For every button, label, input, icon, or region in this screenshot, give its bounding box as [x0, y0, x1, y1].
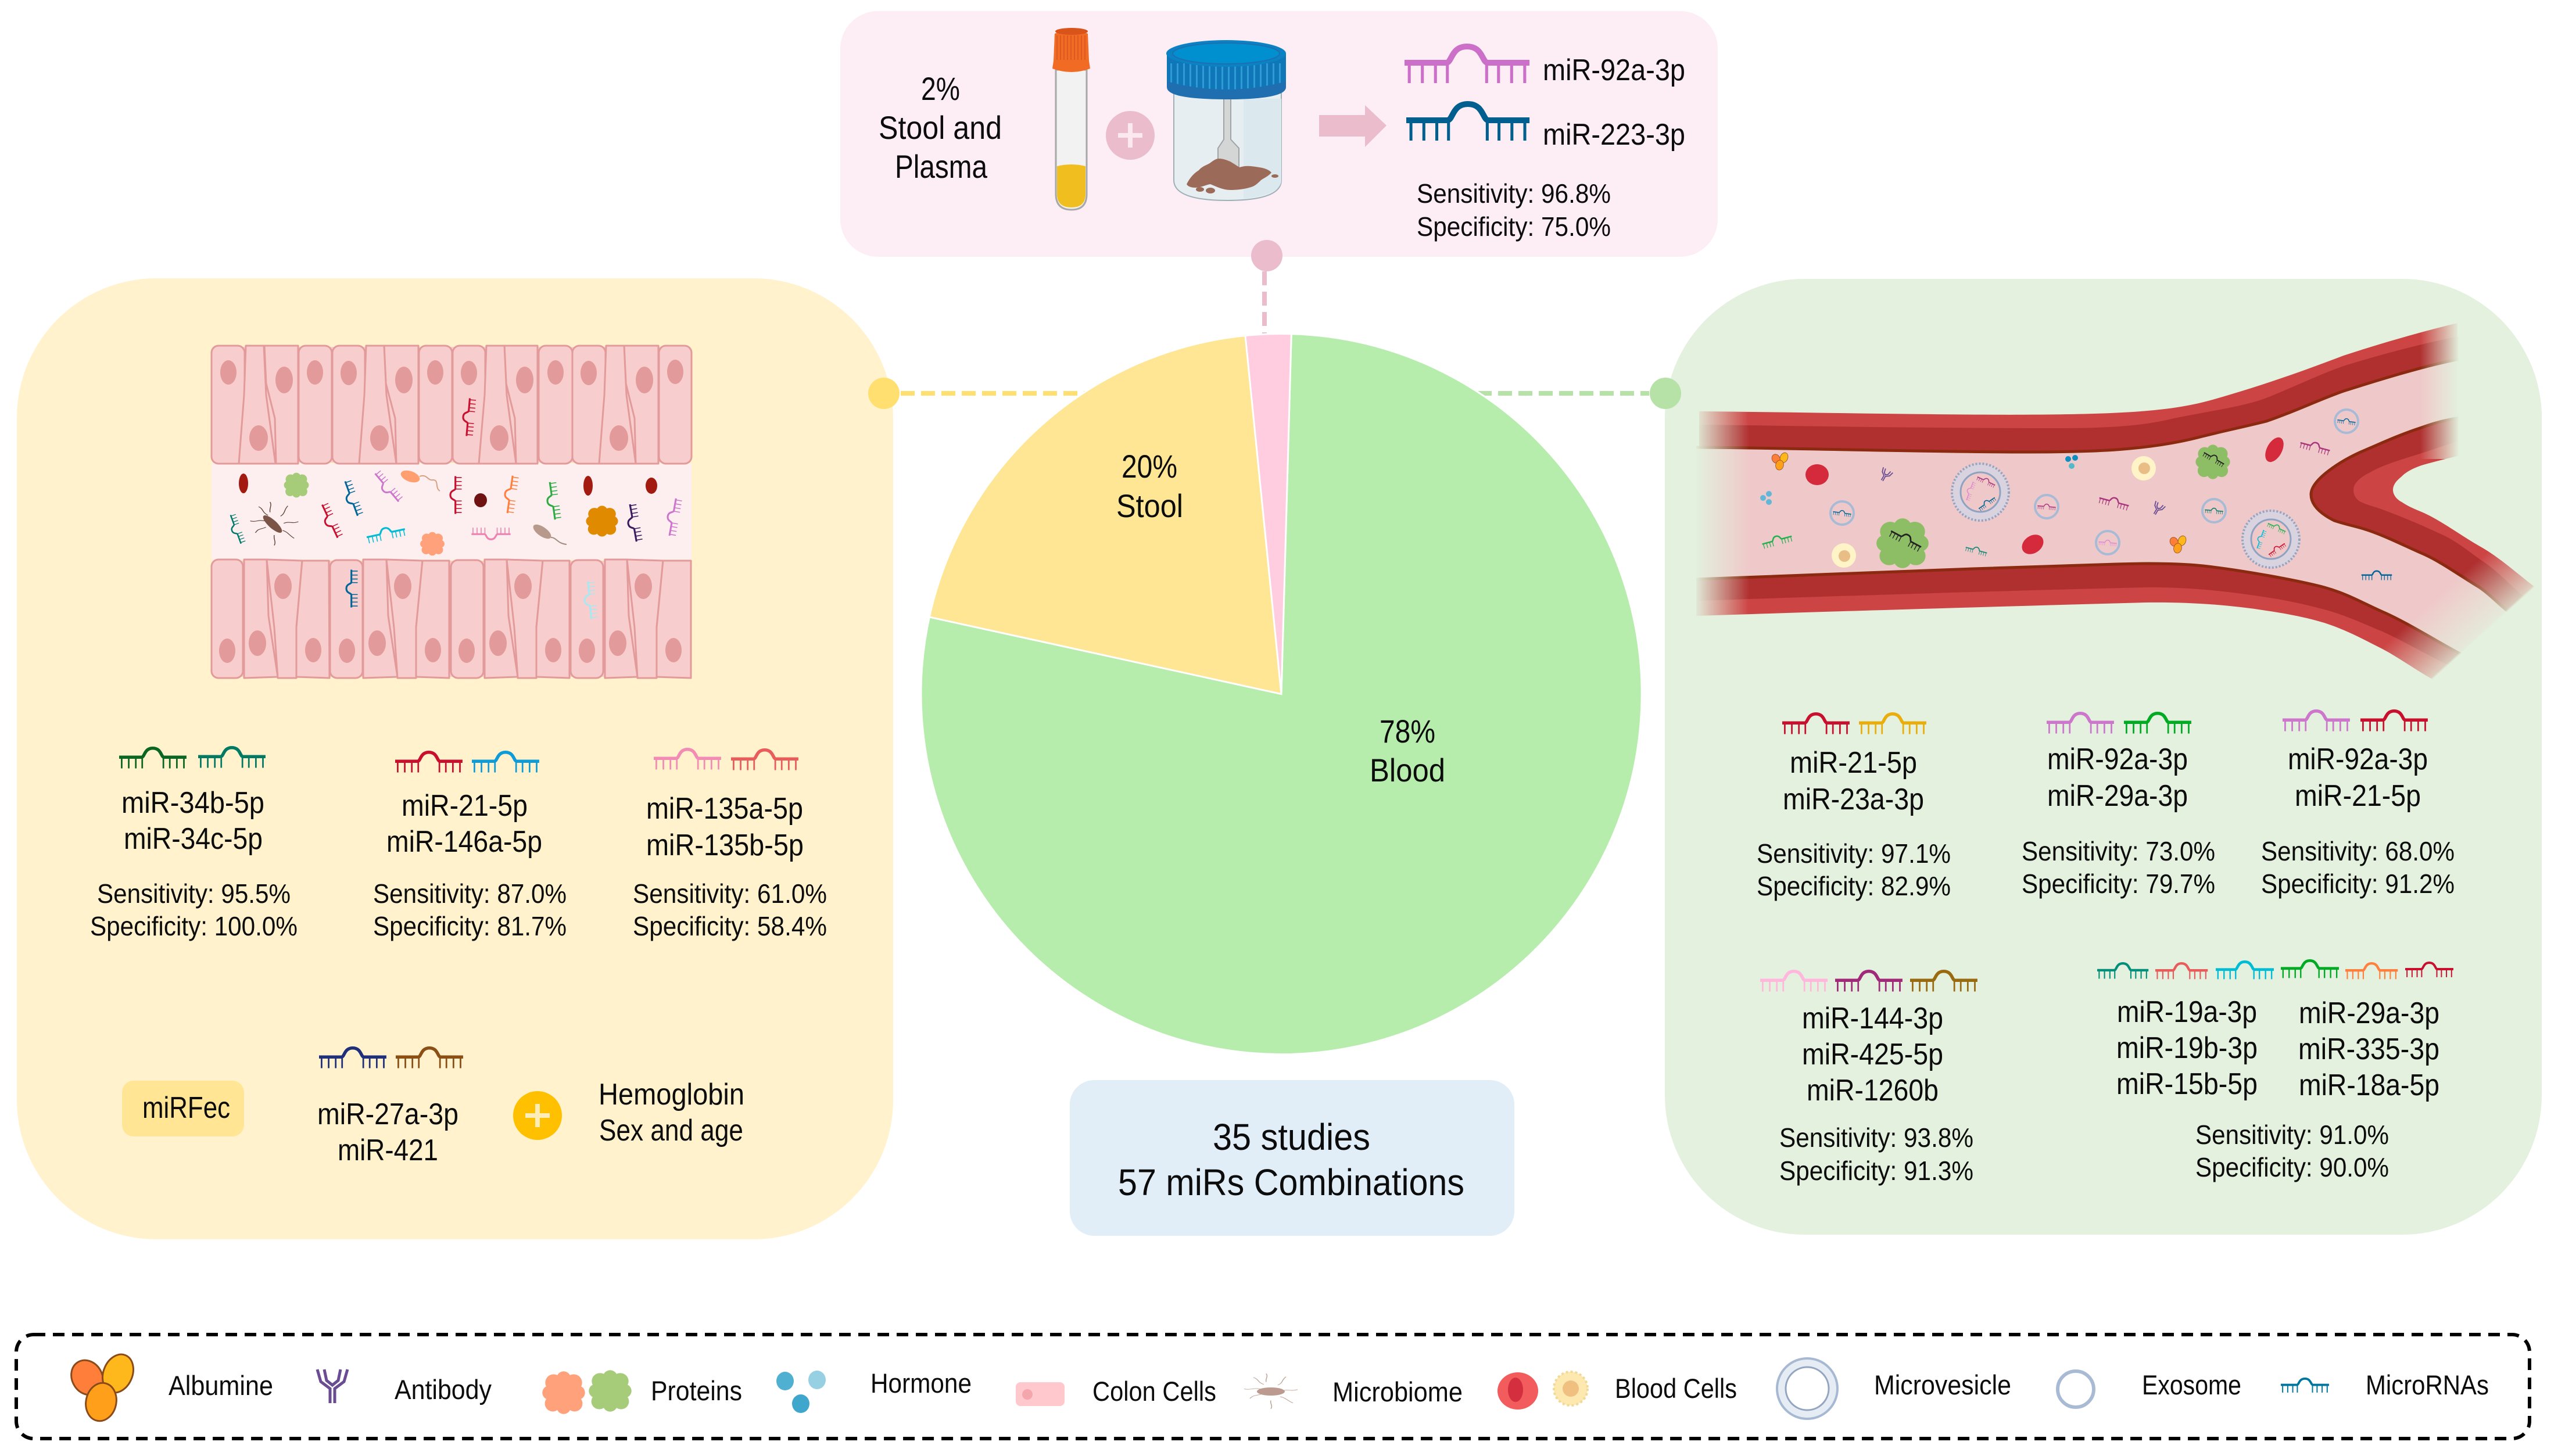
combination: miR-135a-5p and miR-135b-5p: miR-135b-5p	[646, 829, 804, 862]
legend: proteins	[542, 1370, 742, 1414]
legend: exosome: Exosome	[2142, 1369, 2241, 1400]
combination: six miRNA panel: miR-19b-3p	[2116, 1031, 2258, 1065]
legend: colon cells	[1016, 1376, 1216, 1407]
pie chart: sample sources	[921, 333, 1642, 1054]
label: 20% stool: 20%	[1122, 448, 1177, 485]
combination: miR-34b-5p and miR-34c-5p: miR-34b-5p	[121, 786, 264, 820]
combination: six miRNA panel: miR-15b-5p	[2116, 1067, 2258, 1101]
combination: miR-27a-3p and miR-421: miR-421	[338, 1134, 438, 1167]
combination: six miRNA panel: miR-29a-3p	[2299, 996, 2439, 1030]
callout: studies summary: 57 miRs Combinations	[1118, 1161, 1464, 1203]
connector: blood to pie	[1478, 378, 1681, 409]
proteins	[1876, 444, 2230, 568]
combination: miR-144-3p, miR-425-5p and miR-1260b: miR-425-5p	[1802, 1038, 1943, 1071]
icon: stool sample jar	[1166, 40, 1286, 200]
legend: colon cells: Colon Cells	[1092, 1376, 1216, 1407]
combination: miR-92a-3p and miR-21-5p: Specificity: 91.2%	[2261, 869, 2455, 899]
combination: six miRNA panel: miR-18a-5p	[2299, 1068, 2439, 1102]
combination: miR-21-5p and miR-23a-3p: Sensitivity: 97.1%	[1757, 838, 1951, 869]
lumen contents: blood cells, proteins, microbes	[239, 468, 657, 555]
lumen and intracellular miRNAs	[227, 398, 682, 619]
combination: miR-21-5p and miR-23a-3p: Specificity: 82.9%	[1757, 871, 1951, 901]
combination: miR-92a-3p and miR-29a-3p: Specificity: 79.7%	[2022, 869, 2215, 899]
microvesicles	[1952, 464, 2299, 568]
combination: miR-92a-3p and miR-29a-3p: Sensitivity: 73.0%	[2022, 836, 2215, 866]
combination: miR-144-3p, miR-425-5p and miR-1260b	[1760, 971, 1977, 1186]
miRFec label: miRFec	[142, 1091, 230, 1125]
label: 78% blood: 78%	[1380, 713, 1435, 749]
miRNA: miR-92a-3p	[1405, 46, 1685, 87]
slice: stool 20%	[929, 336, 1281, 694]
combination: miR-92a-3p and miR-29a-3p	[2022, 713, 2215, 899]
combination: miR-92a-3p and miR-21-5p: Sensitivity: 68.0%	[2261, 836, 2455, 866]
legend: microvesicle: Microvesicle	[1874, 1369, 2011, 1400]
combination: miR-135a-5p and miR-135b-5p: Sensitivity: 61.0%	[633, 878, 827, 909]
combination: miR-144-3p, miR-425-5p and miR-1260b: Specificity: 91.3%	[1779, 1156, 1973, 1186]
miRNA: miR-92a-3p: miR-92a-3p	[1543, 53, 1685, 87]
legend: albumine	[65, 1350, 273, 1424]
panel: blood (green)	[1665, 279, 2542, 1235]
combination: miR-21-5p and miR-146a-5p: Sensitivity: 87.0%	[373, 878, 567, 909]
combination: miR-34b-5p and miR-34c-5p: Sensitivity: 95.5%	[97, 878, 291, 909]
combination: miR-34b-5p and miR-34c-5p: miR-34c-5p	[124, 822, 263, 856]
label: 78% blood	[1370, 713, 1445, 788]
combination: miR-21-5p and miR-146a-5p: Specificity: 81.7%	[373, 911, 567, 941]
combination: miR-144-3p, miR-425-5p and miR-1260b: Sensitivity: 93.8%	[1779, 1123, 1973, 1153]
arrow	[1319, 105, 1387, 147]
illustration: colon epithelium with miRNAs	[212, 346, 692, 678]
callout: studies summary	[1070, 1080, 1514, 1236]
combination: miR-21-5p and miR-146a-5p	[373, 752, 567, 941]
legend: hormone: Hormone	[870, 1368, 972, 1398]
legend: microRNAs: MicroRNAs	[2366, 1369, 2489, 1400]
text: sensitivity and specificity: Sensitivity: 96.8%	[1417, 178, 1611, 209]
slice: blood 78%	[921, 334, 1642, 1054]
legend	[16, 1335, 2530, 1439]
panel: stool and plasma (pink)	[840, 11, 1718, 257]
text: sensitivity and specificity: Specificity: 75.0%	[1417, 211, 1611, 242]
text: sensitivity and specificity	[1417, 178, 1611, 242]
combination: miR-21-5p and miR-23a-3p	[1757, 714, 1951, 901]
legend: antibody: Antibody	[395, 1374, 492, 1405]
combination: six miRNA panel	[2097, 960, 2453, 1182]
combination: six miRNA panel: miR-335-3p	[2298, 1032, 2439, 1066]
combination: miR-34b-5p and miR-34c-5p: Specificity: 100.0%	[90, 911, 298, 941]
combination: miR-92a-3p and miR-21-5p: miR-21-5p	[2295, 779, 2421, 813]
legend: antibody	[317, 1369, 492, 1405]
icon: plus	[513, 1091, 562, 1140]
miRFec label	[122, 1081, 244, 1136]
free miRNAs	[1761, 439, 2392, 580]
panel: stool (yellow)	[17, 278, 893, 1239]
label: 20% stool	[1116, 448, 1183, 524]
bottom row of colon cells	[212, 560, 691, 678]
legend: blood cells: Blood Cells	[1615, 1373, 1737, 1404]
combination: six miRNA panel: Sensitivity: 91.0%	[2195, 1120, 2389, 1150]
combination: miR-144-3p, miR-425-5p and miR-1260b: miR-144-3p	[1802, 1002, 1943, 1035]
icon: plasma tube	[1052, 28, 1090, 210]
label: 78% blood: Blood	[1370, 752, 1445, 788]
combination: miR-21-5p and miR-146a-5p: miR-146a-5p	[386, 825, 542, 859]
legend: microbiome: Microbiome	[1332, 1376, 1463, 1407]
callout: studies summary: 35 studies	[1213, 1116, 1370, 1158]
connector: plasma to pie	[1251, 240, 1282, 335]
combination: six miRNA panel: miR-19a-3p	[2117, 995, 2257, 1029]
combination: miR-135a-5p and miR-135b-5p: Specificity: 58.4%	[633, 911, 827, 941]
text: 2% stool and plasma	[879, 70, 1002, 185]
connector: stool to pie	[868, 378, 1087, 409]
legend: microRNAs	[2281, 1369, 2489, 1400]
combination: miR-92a-3p and miR-29a-3p: miR-92a-3p	[2047, 743, 2188, 776]
combination: miR-92a-3p and miR-29a-3p: miR-29a-3p	[2047, 779, 2188, 813]
legend: exosome	[2058, 1369, 2241, 1407]
text: hemoglobin, sex and age	[599, 1078, 744, 1147]
top row of colon cells	[212, 346, 692, 464]
combination: miR-34b-5p and miR-34c-5p	[90, 748, 298, 941]
text: 2% stool and plasma: Plasma	[895, 148, 988, 185]
combination: miR-27a-3p and miR-421: miR-27a-3p	[317, 1098, 458, 1131]
combination: miR-27a-3p and miR-421	[317, 1048, 463, 1167]
legend: albumine: Albumine	[169, 1370, 273, 1401]
combination: miR-135a-5p and miR-135b-5p: miR-135a-5p	[646, 792, 803, 826]
legend: proteins: Proteins	[651, 1375, 742, 1406]
combination: miR-21-5p and miR-23a-3p: miR-21-5p	[1790, 746, 1917, 780]
legend: microbiome	[1244, 1373, 1463, 1409]
legend: blood cells	[1497, 1372, 1737, 1410]
icon: plus	[1106, 111, 1155, 160]
text: hemoglobin, sex and age: Sex and age	[599, 1114, 743, 1147]
slice: stool and plasma 2%	[1245, 333, 1291, 694]
combination: miR-92a-3p and miR-21-5p: miR-92a-3p	[2288, 743, 2428, 776]
text: hemoglobin, sex and age: Hemoglobin	[599, 1078, 744, 1111]
combination: miR-144-3p, miR-425-5p and miR-1260b: miR-1260b	[1807, 1074, 1939, 1107]
combination: miR-135a-5p and miR-135b-5p	[633, 749, 827, 941]
combination: miR-21-5p and miR-146a-5p: miR-21-5p	[402, 789, 528, 823]
albumin, red cells, white cells, antibodies and hormones	[1760, 435, 2287, 568]
text: 2% stool and plasma: 2%	[921, 70, 960, 107]
combination: miR-21-5p and miR-23a-3p: miR-23a-3p	[1783, 783, 1924, 816]
label: 20% stool: Stool	[1116, 487, 1183, 524]
legend: hormone	[776, 1368, 972, 1413]
legend: microvesicle	[1777, 1358, 2011, 1419]
text: 2% stool and plasma: Stool and	[879, 109, 1002, 146]
miRNA: miR-223-3p: miR-223-3p	[1543, 118, 1685, 152]
combination: miR-92a-3p and miR-21-5p	[2261, 711, 2455, 899]
exosomes	[1830, 410, 2358, 554]
illustration: blood vessel with circulating miRNA carriers	[1696, 315, 2542, 679]
miRNA: miR-223-3p	[1406, 104, 1685, 152]
combination: six miRNA panel: Specificity: 90.0%	[2195, 1152, 2389, 1182]
